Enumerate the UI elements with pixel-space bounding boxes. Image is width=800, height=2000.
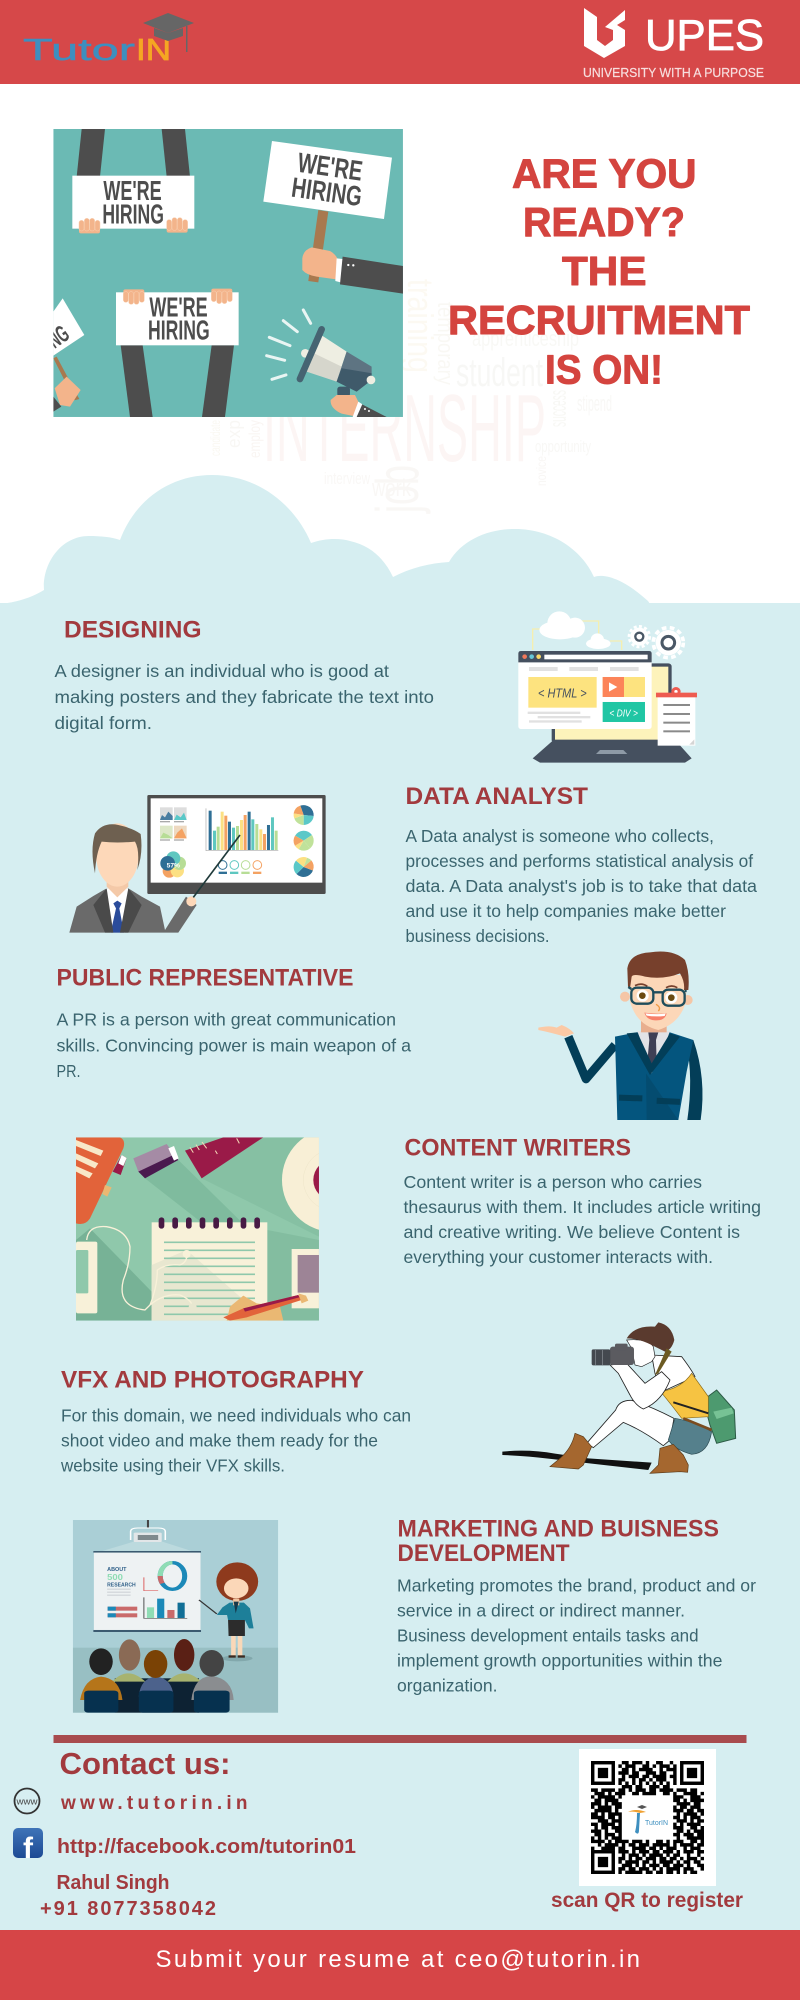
image: we're hiring: WE'RE [149,291,208,322]
heading: marketing and buisness development: MARKETING AND BUISNESS [398,1516,719,1542]
icon: man presenting charts: 57% [167,863,180,870]
icon: facebook: f [23,1832,34,1865]
image: marketing presentation: 500 [107,1574,123,1582]
text: data analyst description: processes and performs statistical analysis of [406,851,753,871]
text: marketing description: service in a direct or indirect manner. [397,1600,685,1620]
text: content writers description [404,1172,761,1267]
image: marketing presentation: ABOUT [107,1567,127,1573]
cloud and light-blue page background [0,475,800,1933]
background word cloud [207,279,612,514]
icon: man with glasses [538,952,703,1120]
logo: TutorIN: IN [136,32,171,67]
background word cloud: candidate [207,420,223,456]
image: we're hiring: NG [43,320,74,354]
text: public representative description: skills. Convincing power is main weapon of a [56,1036,411,1056]
logo: UPES: UPES [645,11,764,60]
text: data analyst description: data. A Data analyst's job is to take that data [406,876,757,896]
text: data analyst description: business decisions. [406,926,550,946]
icon: www: www [15,1796,38,1808]
text: content writers description: everything your customer interacts with. [404,1247,713,1267]
text: marketing description [397,1576,756,1696]
text: marketing description: organization. [397,1676,498,1696]
icon: photographer [502,1322,736,1473]
text: facebook url: http://facebook.com/tutorin01 [57,1836,356,1858]
background word cloud: job [364,465,431,514]
icon: facebook [13,1828,43,1865]
image: we're hiring: WE'RE [103,175,162,206]
text: vfx description: For this domain, we need individuals who can [61,1406,411,1426]
text: content writers description: and creative writing. We believe Content is [404,1222,740,1242]
background word cloud: apprenticeship [472,326,579,351]
title: READY? [523,199,685,245]
title: IS ON! [545,346,663,392]
title: RECRUITMENT [448,297,750,343]
text: data analyst description: and use it to help companies make better [406,901,726,921]
icon: web design laptop: < HTML > [538,687,587,701]
text: content writers description: thesaurus with them. It includes article writing [404,1197,761,1217]
section: vfx and photography [60,1366,411,1476]
heading: contact us: Contact us: [60,1746,230,1781]
text: website: www.tutorin.in [60,1793,248,1814]
heading: public representative: PUBLIC REPRESENTATIVE [56,964,354,992]
background word cloud: temporary [433,302,458,385]
text: designing description [54,661,434,733]
text: content writers description: Content writer is a person who carries [404,1172,702,1192]
background word cloud: opportunity [535,437,591,456]
heading: marketing and buisness development [398,1516,719,1567]
text: designing description: A designer is an individual who is good at [54,661,389,681]
header band [0,0,800,84]
heading: data analyst: DATA ANALYST [406,783,588,810]
section: designing [54,616,434,733]
icon: www [14,1788,40,1814]
text: vfx description: shoot video and make them ready for the [61,1430,378,1450]
text: designing description: digital form. [54,713,152,733]
background word cloud: work [371,475,412,502]
text: public representative description: A PR is a person with great communication [56,1010,396,1030]
background word cloud: interview [324,469,370,488]
logo: TutorIN: Tutor [23,32,135,67]
section: content writers [404,1134,761,1267]
title [448,150,750,392]
background word cloud: training [400,279,441,373]
text: public representative description [56,1010,411,1081]
image: we're hiring: WE'RE [296,147,364,187]
heading: vfx and photography: VFX AND PHOTOGRAPHY [61,1366,364,1394]
logo: UPES: UNIVERSITY WITH A PURPOSE [583,65,764,80]
text: phone number: +91 8077358042 [40,1898,216,1920]
section: marketing and business development [397,1516,756,1696]
footer band [0,1930,800,2000]
contact block [13,1746,356,1920]
background word cloud: success [545,390,572,427]
section: public representative [56,964,411,1081]
background word cloud: student [456,351,543,395]
text: contact name: Rahul Singh [56,1872,170,1894]
text: marketing description: Marketing promotes the brand, product and or [397,1576,756,1596]
heading: marketing and buisness development: DEVELOPMENT [398,1540,570,1567]
image: content writing desk [76,1137,319,1321]
text: public representative description: PR. [56,1061,80,1081]
text: scan QR to register: scan QR to register [551,1889,743,1912]
text: marketing description: Business development entails tasks and [397,1626,698,1646]
heading: designing: DESIGNING [64,616,202,644]
QR code [579,1749,716,1886]
icon: web design laptop: < DIV > [609,708,638,719]
image: we're hiring: HIRING [102,198,164,229]
icon: QR centre logo: TutorIN [645,1820,668,1827]
section: data analyst [406,783,757,946]
text: designing description: making posters and they fabricate the text into [54,687,434,707]
title: THE [562,248,646,294]
text: data analyst description [406,826,757,946]
text: submit resume: Submit your resume at ceo@tutorin.in [156,1946,640,1973]
image: marketing presentation: RESEARCH [107,1583,136,1588]
icon: web design laptop [518,611,697,763]
background word cloud: employ [247,420,264,458]
text: marketing description: implement growth opportunities within the [397,1650,722,1670]
logo: UPES [583,8,764,80]
title: ARE YOU [512,150,696,196]
image: we're hiring: HIRING [290,172,364,212]
heading: content writers: CONTENT WRITERS [404,1134,631,1162]
image: we're hiring: HIRING [148,314,210,345]
image: we're hiring [43,129,403,417]
logo: TutorIN [23,13,194,67]
text: data analyst description: A Data analyst is someone who collects, [406,826,714,846]
text: vfx description [60,1406,411,1476]
text: stipend [577,391,612,416]
icon: man presenting charts [69,795,326,933]
image: marketing presentation [73,1520,278,1713]
background word cloud: novice [533,456,549,486]
text: vfx description: website using their VFX skills. [60,1456,285,1476]
background word cloud: exp [224,420,244,448]
